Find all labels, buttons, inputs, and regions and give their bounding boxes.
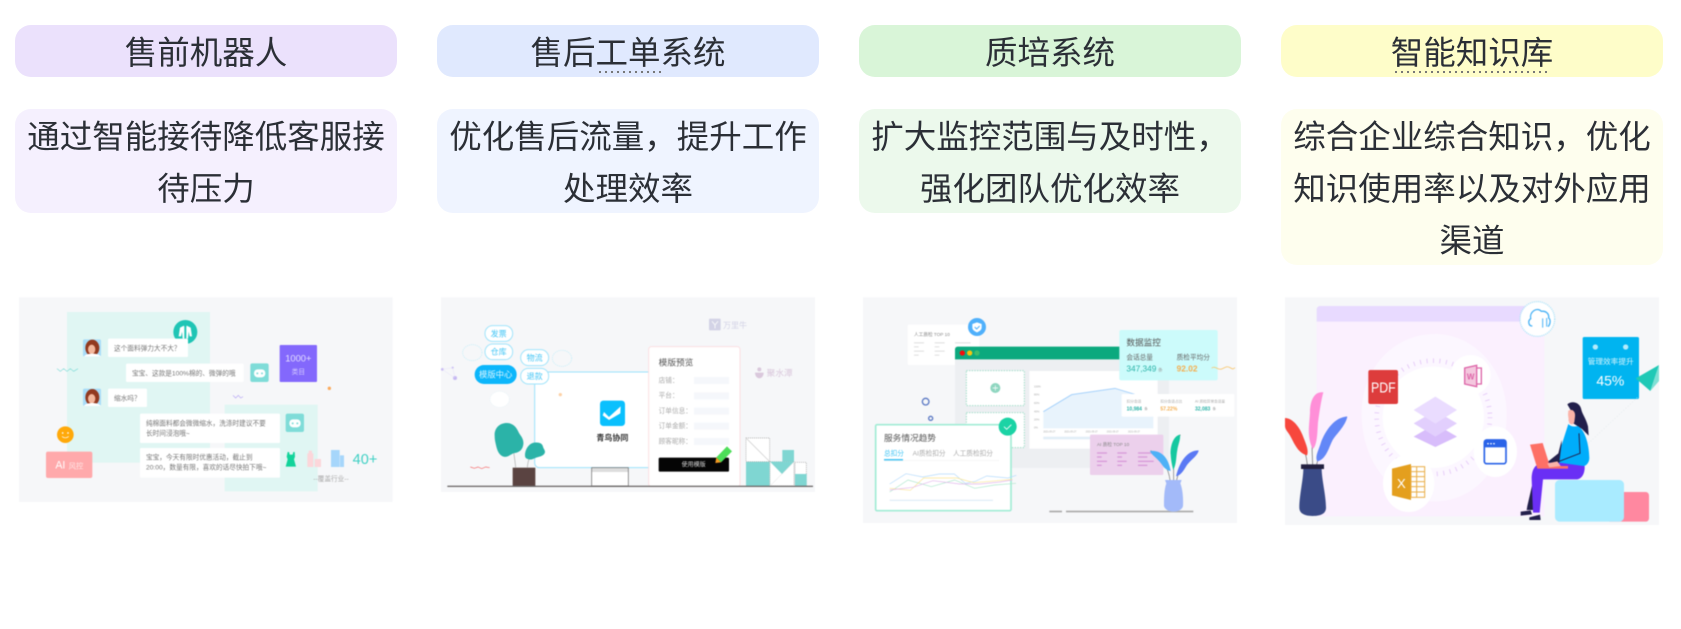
chat bubble: 纯棉面料都会微微缩水，洗涤时建议不要 [146,418,266,427]
figure: woman with laptop [1521,402,1589,520]
window: 青鸟协同: 青鸟协同 [596,433,628,443]
panel: browser window [1317,306,1544,516]
heading: 质培系统 [859,25,1241,77]
panel: template preview: 订单信息： [659,406,692,415]
area chart: 2021-05-27 [1064,432,1077,434]
tag: 退款: 退款 [527,371,543,381]
card: score stats: 扣分会话 [1127,398,1142,403]
card: score stats: 32,083 [1195,406,1211,412]
panel: template preview: 平台： [659,391,679,400]
illustration: ticket templates [440,298,814,492]
card: AI QA top 10 [1090,435,1163,475]
chat bubble: 缩水吗？ [114,393,141,402]
icon: Word [1465,365,1481,387]
card: score stats: 条 [1213,406,1217,411]
illustration: knowledge base [1284,298,1660,524]
icon: Excel: X [1397,476,1406,491]
panel: template preview: 模版预览 [659,357,694,368]
badge: AI risk control: AI [55,460,65,472]
icon: customer avatar [83,389,101,406]
text block: 售后工单系统 description: 优化售后流量，提升工作处理效率 [449,119,807,207]
chat bubble: 20:00，数量有限，喜欢的话尽快拍下哦~ [146,463,266,472]
card: manual QA top 10 [908,325,979,365]
logo: 聚水潭 [755,367,793,378]
stat: 40+ industries: 40+ [353,452,377,468]
area chart: 80% [1034,393,1040,397]
area chart [1034,384,1153,439]
card: service trend [876,425,1016,511]
icon: shield [968,318,986,336]
stat: 1000+ categories [280,345,317,382]
chat bubble [126,364,244,382]
icon: PDF [1368,370,1398,404]
icon: dress [286,452,296,467]
area chart: 2021-05-27 [1107,432,1119,434]
heading: 智能知识库 [1281,25,1663,77]
card: AI QA top 10: AI 质检 TOP 10 [1097,441,1130,448]
icon: pencil [715,446,732,463]
boxes [1555,480,1649,522]
card: data monitor: 质检平均分 [1177,352,1210,361]
icon: cloud sync [1520,302,1555,336]
icon: Word: W [1467,372,1475,381]
area chart: 0% [1034,426,1038,430]
card: manual QA top 10: 人工质检 TOP 10 [914,331,950,338]
card: service trend: AI质检扣分 [913,449,946,458]
badge: AI risk control: 风控 [69,462,84,471]
icon: Excel [1392,464,1425,500]
dashboard window [955,347,1169,468]
icon: smiley [57,426,74,443]
stat: efficiency up 45%: 45% [1596,373,1624,389]
icon: paper plane [1636,365,1659,391]
card: score stats: AI 质检异常会话量 [1195,398,1225,403]
icon: fridge [331,450,344,467]
area chart: 60% [1034,401,1040,405]
tag: 物流: 物流 [527,353,543,363]
plant [495,423,545,486]
chat bubble: 这个面料弹力大不大？ [114,343,181,352]
icon: check badge [999,418,1017,436]
panel: template preview: 顾客昵称： [659,436,692,445]
chat bubble: 宝宝，今天有限时优惠活动，截止到 [146,453,253,462]
area chart: 2021-05-27 [1086,432,1098,434]
decorative blocks [746,438,807,486]
area chart: 100% [1034,384,1041,388]
logo: 万里牛 [709,319,747,330]
area chart: 40% [1034,409,1040,413]
panel: template preview: 使用模版 [682,461,706,469]
icon: stacked layers [1414,397,1457,447]
logo: 万里牛: 万里牛 [723,320,747,330]
area chart: 20% [1034,418,1040,422]
card: score stats: 扣分会话占比 [1160,398,1183,403]
chat bubble [108,389,147,407]
chat bubble [140,414,280,443]
tag: 退款 [521,368,549,384]
stat: 40+ industries [313,452,377,483]
heading: 质培系统: 质培系统 [985,35,1115,71]
card: service trend: 服务情况趋势 [884,432,936,443]
stat: efficiency up 45% [1583,337,1639,399]
card: score stats [1122,394,1234,417]
card: score stats: 57.22% [1160,406,1178,412]
area chart: 2021-05-27 [1043,432,1056,434]
card: service trend: 人工质检扣分 [953,449,993,458]
panel: template preview: 店铺： [659,375,679,384]
icon: robot [286,414,304,432]
card: service trend: 总扣分 [884,449,904,458]
heading: 智能知识库: 智能知识库 [1391,35,1553,71]
chat bubble [108,339,188,357]
illustration: chatbot conversation [20,298,392,502]
plant in vase [1150,435,1199,512]
heading: 售后工单系统: 售后工单系统 [530,35,726,71]
card: data monitor: 92.02 [1177,364,1198,374]
text block: 智能知识库 description: 综合企业综合知识，优化知识使用率以及对外应用渠道 [1293,119,1651,259]
icon: robot [250,363,269,382]
tag: 模版中心: 模版中心 [479,369,513,379]
tag: 仓库 [485,344,513,360]
chat bubble: 长时间浸泡哦~ [146,428,190,437]
stat: efficiency up 45%: 管理效率提升 [1588,356,1634,366]
icon: customer avatar [83,339,101,357]
stat: 40+ industries: --覆盖行业-- [313,474,349,483]
card: data monitor: 347,349 [1126,364,1157,374]
tag: 仓库: 仓库 [491,347,507,357]
card: score stats: 条 [1144,406,1148,411]
illustration: QA dashboard [864,298,1236,522]
tag: 模版中心 [475,365,517,384]
card: data monitor [1119,330,1218,380]
card: score stats: 10,984 [1127,406,1142,412]
tag: 物流 [521,350,549,366]
panel: template preview [649,347,740,487]
card: data monitor: 条 [1158,367,1163,373]
icon: clothing badge [173,320,197,344]
badge: AI risk control [46,452,92,478]
stat: 1000+ categories: 类目 [292,367,305,376]
icon: PDF: PDF [1371,381,1396,397]
heading: 售前机器人 [15,25,397,77]
heading: 售后工单系统 [437,25,819,77]
heading: 售前机器人: 售前机器人 [125,35,287,71]
chat bubble [140,448,280,478]
logo: 聚水潭: 聚水潭 [767,367,793,378]
tag: 发票: 发票 [491,328,507,338]
chat bubble: 宝宝、这款是100%棉的、微弹的哦 [132,368,236,377]
text block: 质培系统 description: 扩大监控范围与及时性，强化团队优化效率 [871,119,1229,207]
card: data monitor: 数据监控 [1126,336,1161,347]
panel: template preview: 订单金额： [659,421,692,430]
stat: 1000+ categories: 1000+ [285,354,311,364]
window: 青鸟协同 [535,372,658,468]
tag: 发票 [485,326,513,341]
icon: cosmetics [307,451,321,467]
icon: browser window [1484,440,1506,464]
text block: 售前机器人 description: 通过智能接待降低客服接待压力 [27,119,385,207]
card: data monitor: 会话总量 [1126,352,1153,361]
area chart: 2021-05-27 [1128,432,1141,434]
plant in vase [1285,392,1347,516]
